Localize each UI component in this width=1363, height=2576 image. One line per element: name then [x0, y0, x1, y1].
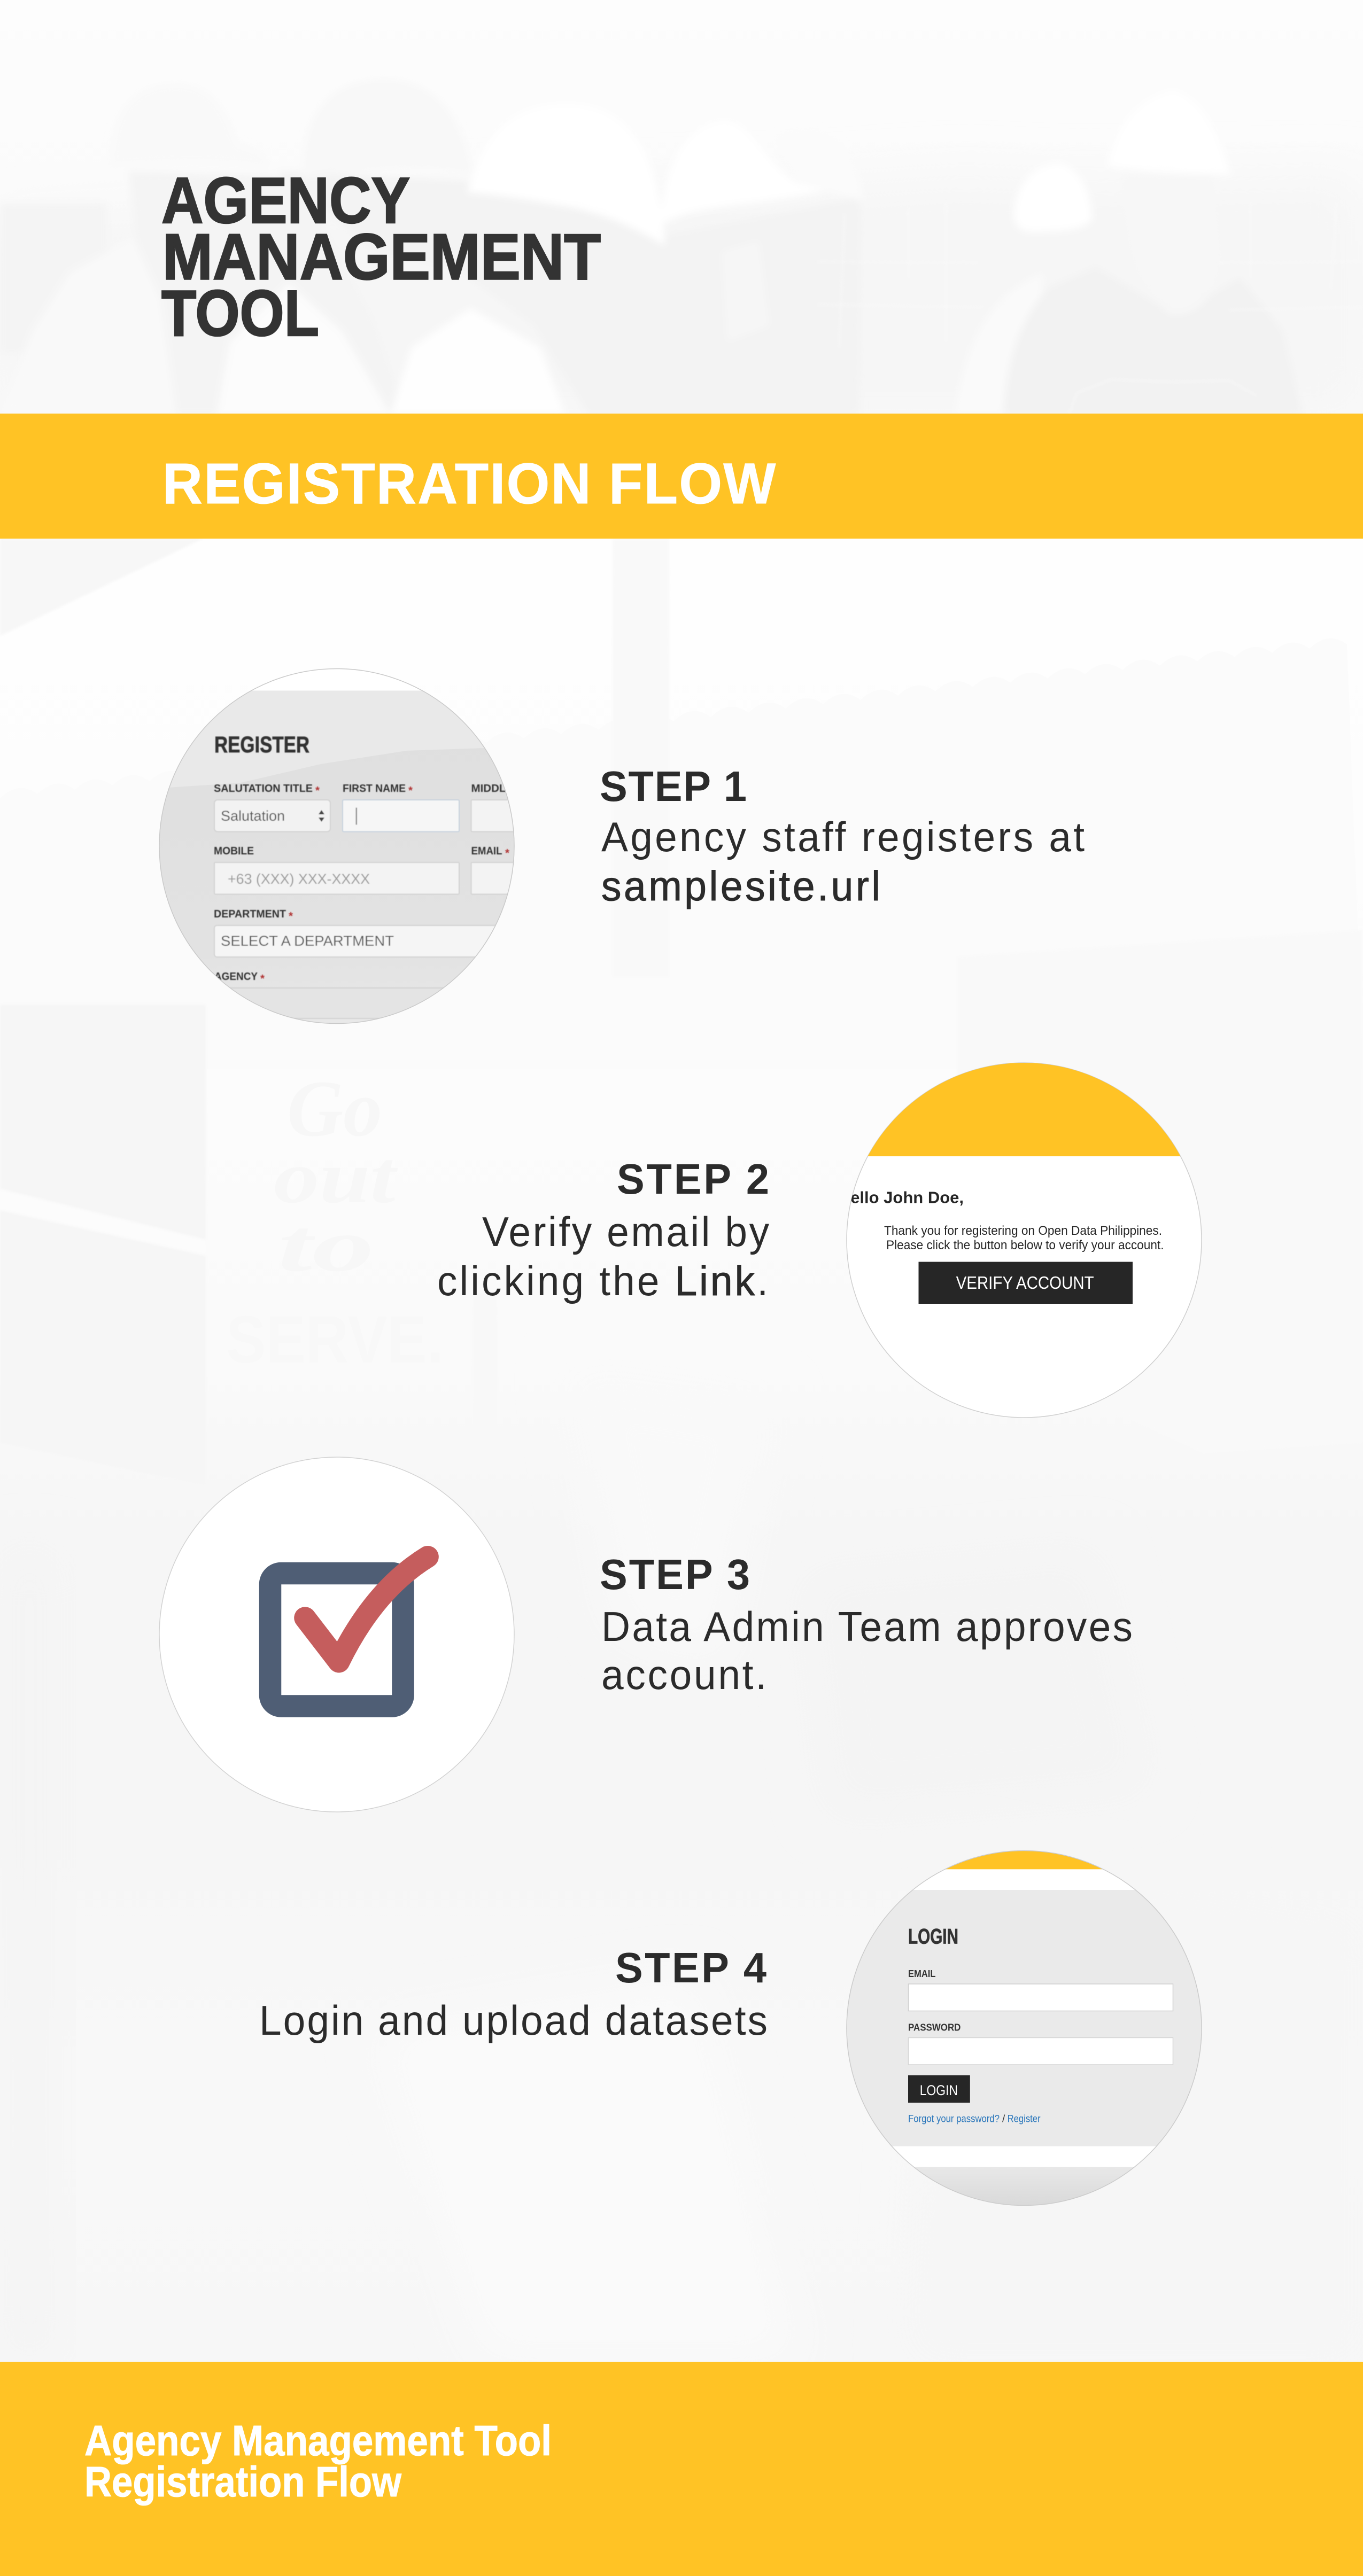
panel: step 4 login screenshot: EMAIL — [908, 1968, 935, 1979]
panel: step 3 approval circle — [159, 1457, 514, 1812]
panel: step 2 verification email screenshot: Please click the button below to verify your account. — [886, 1238, 1164, 1252]
panel: step 1 register form screenshot: * — [260, 972, 265, 985]
title: MANAGEMENT — [162, 220, 601, 293]
step 1 text: STEP 1 — [600, 762, 747, 810]
panel: step 1 register form screenshot: AGENCY — [214, 970, 258, 983]
section band: registration flow — [0, 414, 1363, 539]
body photo background: building with corrugated roof and crowd — [0, 539, 1363, 2362]
step 3 text: Data Admin Team approves — [601, 1604, 1133, 1650]
panel: step 1 register form screenshot: * — [505, 847, 509, 859]
panel: step 1 register form screenshot: EMAIL — [471, 845, 502, 857]
panel: step 4 login screenshot: PASSWORD — [908, 2022, 961, 2033]
panel: step 4 login screenshot: Register — [1008, 2114, 1041, 2125]
icon: checkbox — [270, 1573, 403, 1706]
panel: step 4 login screenshot: / — [1002, 2114, 1005, 2125]
panel: step 1 register form screenshot — [159, 668, 515, 1024]
panel: step 1 register form screenshot: FIRST NAME — [343, 782, 406, 795]
panel: step 1 register form screenshot: Salutation — [221, 808, 285, 824]
panel: step 1 register form screenshot: MIDDLE — [471, 782, 513, 795]
section band: registration flow: REGISTRATION FLOW — [162, 452, 776, 516]
step 2 text: STEP 2 — [617, 1155, 769, 1203]
panel: step 2 verification email screenshot — [839, 1062, 1202, 1418]
panel: step 1 register form screenshot: REGISTER — [214, 732, 309, 758]
step 3 text: account. — [601, 1652, 766, 1698]
panel: step 1 register form screenshot: * — [408, 784, 413, 797]
body photo background: building with corrugated roof and crowd: Go — [287, 1064, 382, 1153]
step 1 text — [600, 762, 1085, 909]
step 1 text: Agency staff registers at — [601, 814, 1085, 860]
panel: step 4 login screenshot: LOGIN — [920, 2082, 958, 2098]
step 2 text: Verify email by — [482, 1209, 770, 1255]
body photo background: building with corrugated roof and crowd: to — [278, 1204, 374, 1287]
panel: step 1 register form screenshot: * — [315, 784, 320, 797]
footer band: Registration Flow — [84, 2458, 402, 2505]
footer band: Agency Management Tool — [84, 2417, 552, 2464]
footer band — [0, 2362, 1363, 2576]
step 2 text: clicking the Link. — [437, 1258, 768, 1304]
panel: step 1 register form screenshot: SALUTATION TITLE — [214, 782, 313, 795]
icon: check mark — [305, 1557, 428, 1662]
title: AGENCY — [161, 164, 410, 237]
title: TOOL — [161, 277, 319, 349]
panel: step 1 register form screenshot: +63 (XXX) XXX-XXXX — [228, 871, 370, 887]
panel: step 1 register form screenshot: * — [289, 910, 293, 922]
panel: step 4 login screenshot: LOGIN — [908, 1925, 958, 1948]
panel: step 4 login screenshot: Forgot your password? — [908, 2114, 1000, 2125]
panel: step 1 register form screenshot: SELECT A DEPARTMENT — [221, 933, 394, 949]
panel: step 1 register form screenshot: MOBILE — [214, 845, 254, 857]
panel: step 2 verification email screenshot: Thank you for registering on Open Data Philippines. — [884, 1224, 1162, 1238]
step 4 text — [259, 1944, 768, 2044]
panel: step 1 register form screenshot: DEPARTMENT — [214, 908, 286, 920]
body photo background: building with corrugated roof and crowd: SERVE. — [226, 1303, 444, 1377]
step 1 text: samplesite.url — [601, 863, 880, 909]
step 2 text — [437, 1155, 770, 1304]
panel: step 2 verification email screenshot: Hello John Doe, — [839, 1188, 964, 1207]
body photo background: building with corrugated roof and crowd: out — [274, 1136, 398, 1219]
panel: step 4 login screenshot — [847, 1850, 1202, 2206]
step 3 text — [600, 1551, 1133, 1698]
step 4 text: STEP 4 — [615, 1944, 766, 1991]
title — [161, 164, 601, 349]
step 3 text: STEP 3 — [600, 1551, 750, 1598]
header photo background: workers in hard hats — [0, 171, 1362, 414]
step 4 text: Login and upload datasets — [259, 1998, 768, 2044]
panel: step 2 verification email screenshot: VERIFY ACCOUNT — [956, 1273, 1094, 1293]
